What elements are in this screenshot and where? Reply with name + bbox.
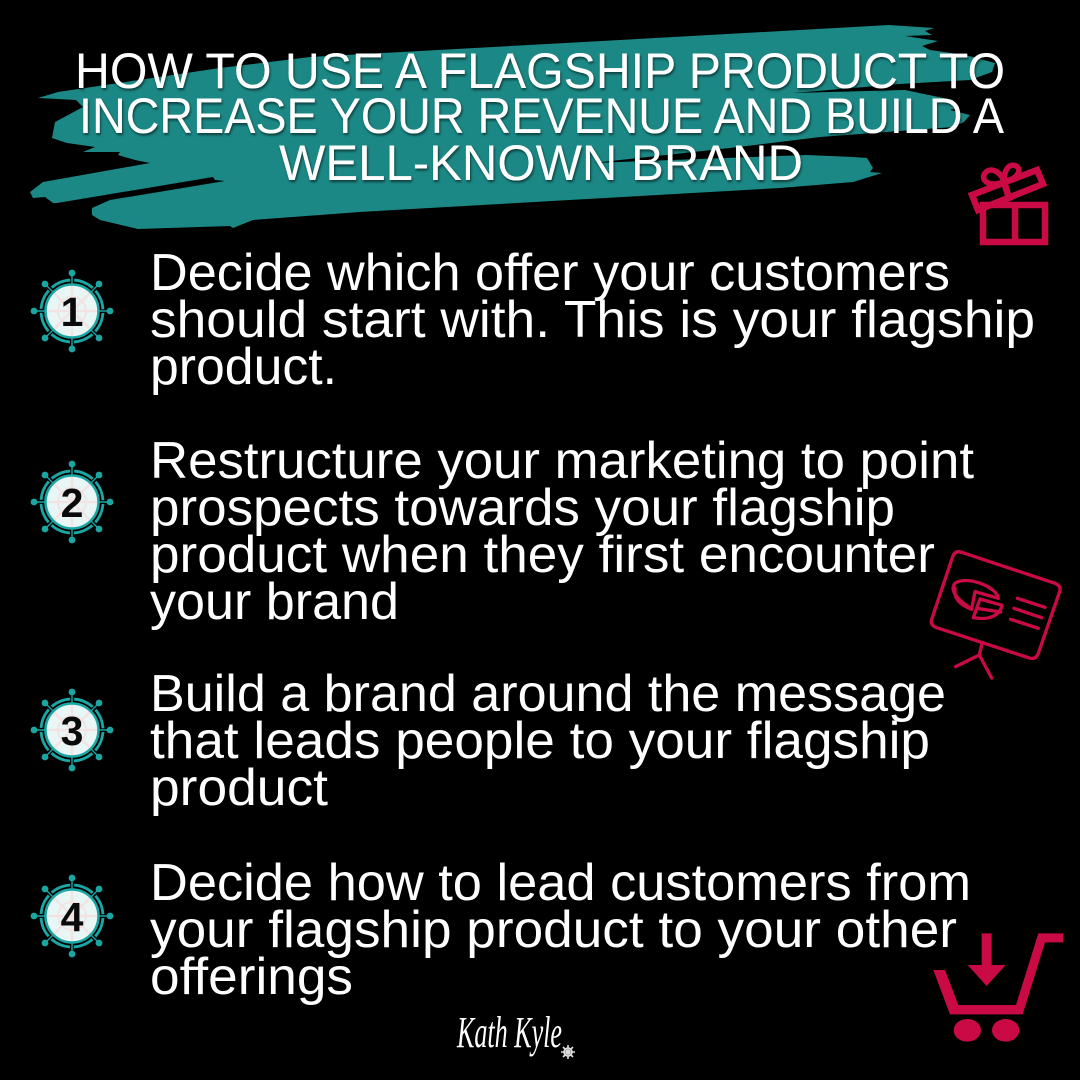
icon: gift box [972,165,1045,243]
signature logo: Kath Kyle [456,1008,562,1057]
text 3: that leads people to your flagship [150,712,930,770]
badge 3 [31,689,113,771]
text 4: offerings [150,948,353,1006]
text 2: product when they first encounter [150,526,935,584]
icon: snowflake [561,1045,575,1059]
icon: presentation board with pie chart [931,552,1060,678]
badge 1 [31,270,113,352]
text 4 [150,854,971,1006]
icon: shopping cart with arrow [933,933,1063,1042]
signature logo [456,1008,575,1059]
text 2: prospects towards your flagship [150,479,895,537]
text 1 [150,244,1035,396]
text 1: should start with. This is your flagship [150,291,1035,349]
text 1: Decide which offer your customers [150,244,950,302]
text 4: Decide how to lead customers from [150,854,971,912]
text 2: Restructure your marketing to point [150,432,975,490]
badge 2: 2 [61,480,83,526]
text 4: your flagship product to your other [150,901,957,959]
title: INCREASE YOUR REVENUE AND BUILD A [79,88,1005,144]
badge 4: 4 [61,894,84,940]
badge 2 [31,461,113,543]
text 1: product. [150,338,337,396]
text 3: product [150,759,329,817]
badge 3: 3 [61,708,83,754]
text 3 [150,665,946,817]
step 3 [31,665,946,817]
title: HOW TO USE A FLAGSHIP PRODUCT TO [75,43,1005,99]
step 2 [31,432,975,631]
teal brush stroke [30,25,995,229]
text 3: Build a brand around the message [150,665,946,723]
text 2 [150,432,975,631]
step 1 [31,244,1035,396]
title [75,43,1005,191]
badge 4 [31,875,113,957]
badge 1: 1 [61,289,83,335]
step 4 [31,854,971,1006]
title: WELL-KNOWN BRAND [279,135,803,191]
text 2: your brand [150,573,399,631]
